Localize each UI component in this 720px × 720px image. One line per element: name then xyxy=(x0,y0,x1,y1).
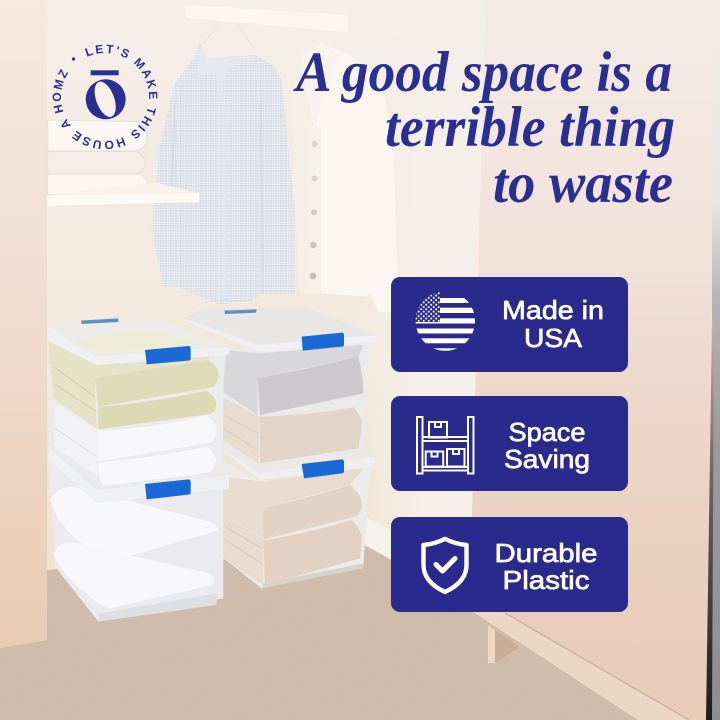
logo: circular brand stamp xyxy=(52,44,158,150)
storage box: top right xyxy=(183,307,377,465)
pillow upper xyxy=(50,487,218,562)
icon: shield with check xyxy=(424,539,466,592)
label: Space xyxy=(508,417,586,447)
front clip xyxy=(302,333,344,351)
beige blanket upper xyxy=(223,468,363,539)
white blanket upper xyxy=(53,406,217,477)
hanging rail xyxy=(186,5,348,32)
green blanket upper xyxy=(48,342,219,428)
badge: Space Saving xyxy=(391,396,628,491)
icon: american flag globe xyxy=(415,291,477,351)
rear clip xyxy=(224,309,257,314)
storage box: bottom right xyxy=(218,443,375,588)
front clip xyxy=(145,346,191,364)
wardrobe leg xyxy=(488,625,520,663)
left wardrobe panel xyxy=(0,0,47,648)
badge: Durable Plastic xyxy=(391,517,628,612)
label: USA xyxy=(524,323,583,353)
headline xyxy=(293,41,675,215)
right wardrobe door xyxy=(472,0,716,720)
beige blanket xyxy=(220,397,362,463)
label: Saving xyxy=(504,444,590,474)
label: Made in xyxy=(502,295,604,325)
brand mark macron xyxy=(91,70,119,75)
collar xyxy=(197,42,255,100)
green blanket lower xyxy=(98,391,216,429)
beige blanket lower xyxy=(223,513,362,585)
wall shelf xyxy=(47,183,199,206)
sleeve fold xyxy=(172,100,263,293)
skirting board xyxy=(364,516,392,560)
slogan separator dot xyxy=(72,57,75,61)
white blanket lower xyxy=(98,447,216,486)
rear clip xyxy=(81,318,118,324)
headline: terrible thing xyxy=(385,96,675,159)
headline: to waste xyxy=(493,152,673,215)
pillow lower xyxy=(53,542,214,608)
storage box: top left xyxy=(48,317,229,487)
badge: Made in USA xyxy=(391,277,628,372)
lid xyxy=(48,447,229,503)
carpet floor xyxy=(0,546,638,720)
label: Plastic xyxy=(502,565,590,595)
right edge grey wall xyxy=(712,0,720,720)
folded towels xyxy=(48,120,147,195)
headline: A good space is a xyxy=(293,41,672,104)
label xyxy=(502,295,604,353)
lid xyxy=(218,447,375,480)
label xyxy=(494,538,598,595)
label: Durable xyxy=(494,538,598,568)
circular slogan: LET'S MAKE THIS HOUSE A HOMZ xyxy=(52,44,158,150)
lid xyxy=(48,327,229,365)
right edge dark gap xyxy=(706,320,714,720)
front clip xyxy=(302,459,344,478)
cardigan on hanger xyxy=(292,43,398,312)
label xyxy=(504,417,590,474)
icon: warehouse shelf with boxes xyxy=(417,417,474,474)
placket xyxy=(223,100,227,300)
checked shirt on hanger xyxy=(152,23,295,305)
lid xyxy=(183,318,377,353)
brand mark letter o xyxy=(86,79,126,120)
storage box: bottom left xyxy=(48,443,229,622)
grey blanket xyxy=(223,345,363,415)
wardrobe plinth xyxy=(473,612,689,720)
front clip xyxy=(145,479,191,499)
